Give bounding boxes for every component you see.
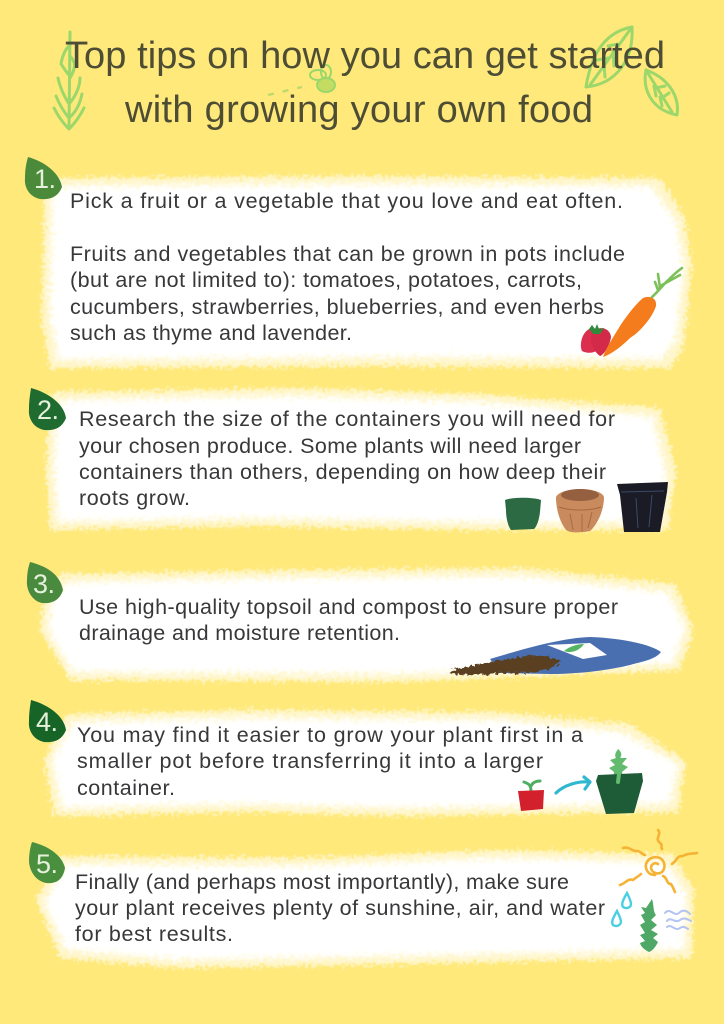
tip 2 text: roots grow. [79, 486, 190, 510]
arrow: small pot to large pot [556, 777, 590, 793]
icon: strawberries [581, 324, 611, 356]
panel: tip 5 [29, 830, 697, 968]
badge: number 2 leaf [29, 388, 66, 430]
badge: number 1 leaf: 1. [34, 164, 56, 194]
title: with growing your own food [124, 89, 593, 131]
icon: carrot [603, 268, 682, 357]
title: Top tips on how you can get started [65, 35, 665, 77]
tip 5 text: your plant receives plenty of sunshine, air, and water [75, 896, 605, 920]
icon: small green pot [505, 498, 541, 530]
tip 2 text: your chosen produce. Some plants will need larger [79, 434, 581, 458]
panel 3 background [40, 568, 694, 682]
badge: number 5 leaf [29, 842, 65, 883]
tip 4 text: You may find it easier to grow your plant first in a [77, 723, 583, 747]
icon: terracotta pot [556, 489, 604, 532]
panel 1 background [42, 176, 692, 368]
badge: number 1 leaf [25, 157, 62, 199]
tip 1 text [70, 189, 625, 345]
tip 2 text: containers than others, depending on how deep their [79, 460, 606, 484]
panel 5 background [36, 850, 694, 968]
badge: number 3 leaf [27, 562, 63, 603]
tip 4 text: smaller pot before transferring it into a larger [77, 749, 543, 773]
icon: large green pot with plant [596, 749, 643, 814]
tip 4 text [77, 723, 583, 800]
panel: tip 2 [29, 388, 676, 532]
tip 2 text: Research the size of the containers you will need for [79, 407, 615, 431]
icon: water drops [612, 893, 631, 926]
decoration: bee with dashed trail [268, 65, 335, 95]
panel 4 background [44, 710, 686, 816]
tip 5 text [75, 870, 605, 946]
tip 2 text [79, 407, 615, 510]
panel: tip 3 [27, 562, 694, 682]
tip 1 text: Pick a fruit or a vegetable that you love and eat often. [70, 189, 623, 213]
tip 4 text: container. [77, 776, 175, 800]
tip 3 text: Use high-quality topsoil and compost to ensure proper [79, 595, 618, 619]
icon: compost bag [447, 637, 661, 675]
tip 1 text: such as thyme and lavender. [70, 321, 352, 345]
badge: number 2 leaf: 2. [37, 395, 59, 425]
icon: green plant [640, 899, 658, 952]
badge: number 5 leaf: 5. [36, 849, 58, 879]
decoration: two leaves [586, 27, 677, 115]
tip 1 text: (but are not limited to): tomatoes, potatoes, carrots, [70, 268, 582, 292]
panel 2 background [46, 388, 676, 530]
icon: black pot [617, 482, 668, 532]
panel: tip 1 [25, 157, 692, 368]
tip 3 text [79, 595, 618, 645]
tip 5 text: for best results. [75, 922, 233, 946]
tip 5 text: Finally (and perhaps most importantly), make sure [75, 870, 569, 894]
title [65, 35, 665, 131]
badge: number 3 leaf: 3. [33, 569, 55, 599]
icon: small red pot with sprout [518, 781, 544, 811]
decoration: rosemary sprig [54, 32, 84, 129]
badge: number 4 leaf [29, 700, 66, 742]
tip 1 text: Fruits and vegetables that can be grown in pots include [70, 242, 625, 266]
badge: number 4 leaf: 4. [36, 707, 58, 737]
icon: sun [620, 830, 697, 892]
panel: tip 4 [29, 700, 686, 816]
tip 3 text: drainage and moisture retention. [79, 621, 400, 645]
icon: air waves [665, 911, 691, 929]
tip 1 text: cucumbers, strawberries, blueberries, and even herbs [70, 295, 604, 319]
